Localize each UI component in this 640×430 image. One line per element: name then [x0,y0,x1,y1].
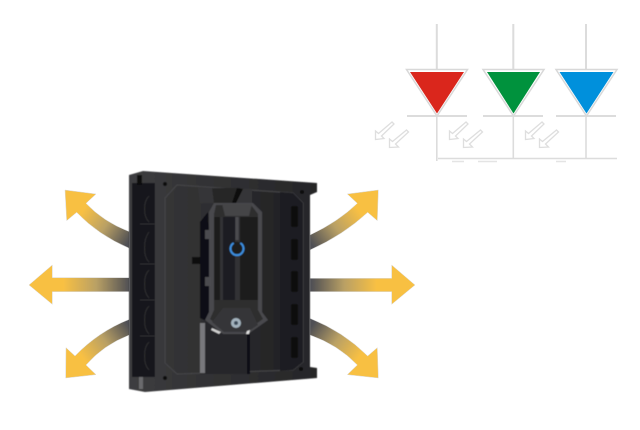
box inner [210,205,263,331]
arrow: down left [66,319,129,378]
status ring [230,217,244,256]
left heat arrows [29,190,129,378]
centre lower plate [200,322,250,374]
arrow: down right [310,318,378,378]
corner screws [163,182,304,380]
side clips [205,230,211,239]
rear recessed panel [165,185,303,374]
light emission arrows: blue [526,122,558,148]
right inner wall [280,192,303,371]
LED: red [406,70,468,116]
top mounting brackets [198,188,252,203]
schematic wiring [407,24,617,162]
light emission arrows: green [450,122,482,148]
arrow: up left [65,190,129,248]
data port [231,318,241,328]
left side column [132,175,155,389]
right heat arrows [310,190,415,378]
cabinet outer frame [129,171,317,392]
side latch [192,257,201,264]
arrow: left [29,265,129,304]
diagram: RGB LED schematic [376,24,617,162]
right connector blocks [291,206,298,358]
LED display cabinet, rear view [129,171,317,392]
metal clips [211,328,221,334]
power and control box [200,203,268,334]
heat sink fins [214,217,258,300]
box body [205,203,268,334]
LED: green [483,70,544,116]
box bottom cap [212,308,258,332]
box top cap [222,204,252,216]
arrow: up right [310,190,378,250]
LED: blue [556,70,617,116]
arrow: right [310,265,415,304]
box shadow [200,212,212,322]
light emission arrows: red [376,122,408,148]
